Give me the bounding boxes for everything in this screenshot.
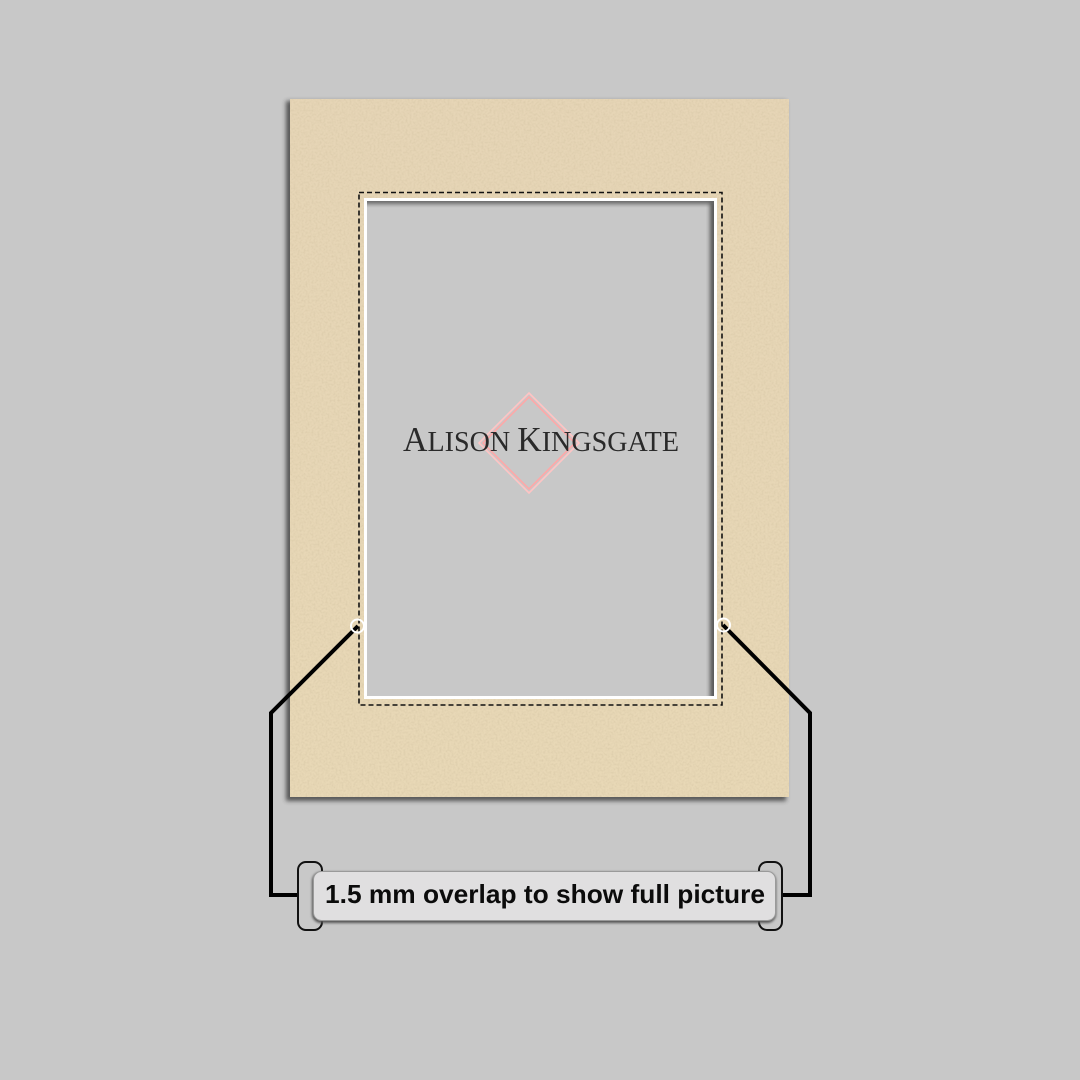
callout text: 1.5 mm overlap to show full picture: [325, 879, 765, 909]
callout label: [312, 872, 776, 923]
logo wordmark: ALISON KINGSGATE: [403, 420, 679, 459]
logo: Alison Kingsgate: [403, 393, 679, 493]
arrow: right leader line: [717, 618, 810, 895]
picture window: [362, 196, 718, 700]
right bracket: [759, 862, 782, 930]
dashed overlap outline: [359, 192, 722, 705]
panel: mount board: [286, 99, 789, 801]
icon: pink diamond: [479, 393, 579, 493]
arrow: left leader line: [271, 620, 364, 895]
left bracket: [298, 862, 322, 930]
